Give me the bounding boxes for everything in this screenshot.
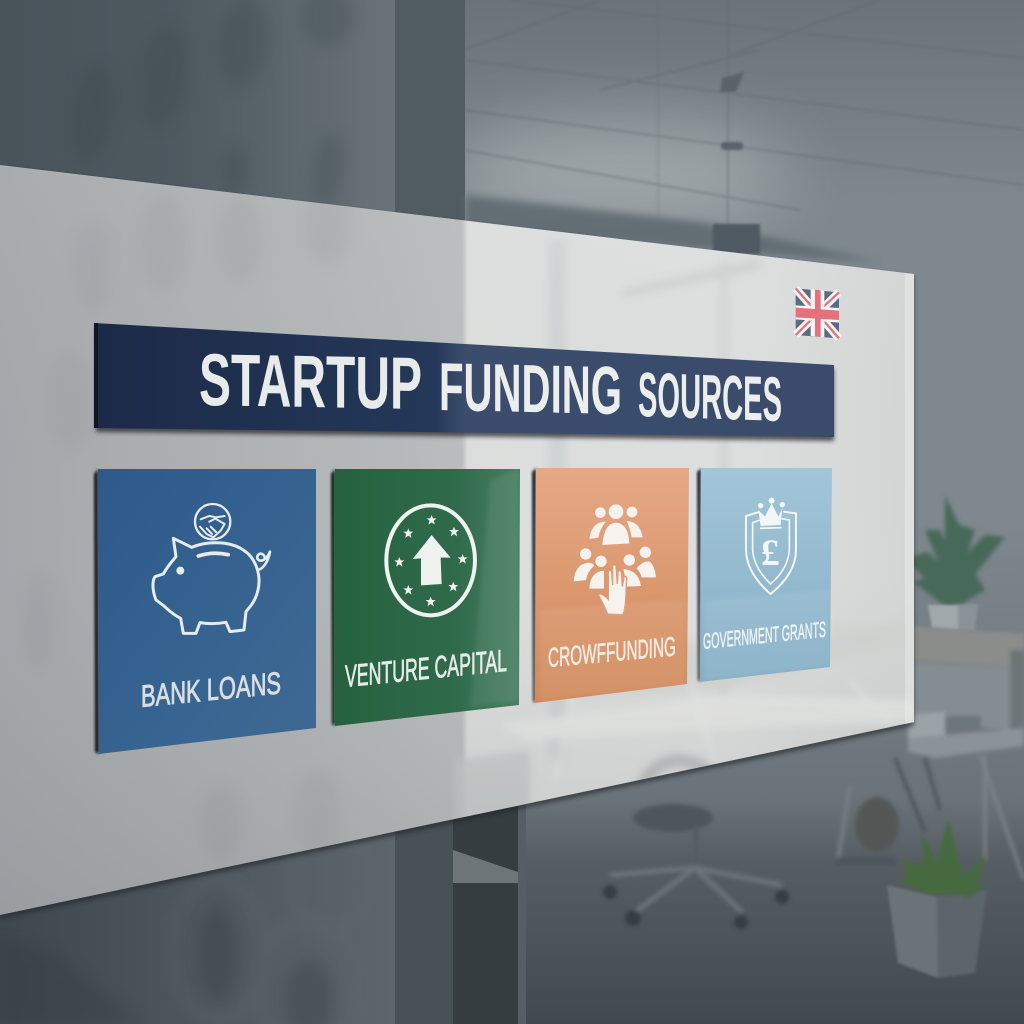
title banner — [94, 323, 834, 441]
ghost numerals on dark glass, lower — [0, 905, 334, 1024]
title text: funding: FUNDING — [439, 349, 622, 429]
scene: mounted glass sign in an office: SOURCES — [638, 360, 782, 435]
shadow band under ceiling — [465, 195, 880, 262]
icon: shield with crown and pound sign — [746, 498, 796, 594]
potted plant on the floor — [887, 818, 990, 978]
panel: frosted glass sign board — [0, 165, 914, 919]
card: crowdfunding — [532, 468, 689, 703]
icon: shield with crown and pound sign: £ — [761, 533, 780, 574]
reflection: window frame and interior — [455, 240, 914, 840]
card: government grants: GOVERNMENT GRANTS — [703, 617, 826, 654]
ceiling pendant fixture — [713, 72, 760, 254]
desk legs, chair and dark planter below the glass — [603, 755, 1024, 929]
card: government grants — [697, 468, 832, 682]
icon: UK flag — [796, 288, 839, 338]
icon: growth arrow in star ring — [386, 505, 475, 615]
shelf and desk seen to the right — [908, 626, 1024, 758]
ghost numerals on dark glass, upper — [64, 0, 354, 210]
card: venture capital — [331, 469, 520, 726]
label: bank loans: BANK LOANS — [141, 665, 281, 714]
plant pot on shelf — [928, 604, 978, 630]
overlay: glass reflection across cards — [470, 470, 830, 708]
icon: piggy bank with handshake coin — [153, 504, 270, 633]
reflection: ghost numerals on glass — [20, 189, 351, 861]
plant on the right wall — [905, 495, 1005, 610]
label: venture capital: VENTURE CAPITAL — [345, 643, 507, 694]
title text: STARTUP — [199, 338, 422, 425]
card: bank loans — [94, 469, 316, 754]
icon: crowd with raised hand — [574, 504, 656, 615]
label: crowffunding: CROWFFUNDING — [548, 632, 676, 673]
ceiling grid lines — [464, 0, 1024, 240]
